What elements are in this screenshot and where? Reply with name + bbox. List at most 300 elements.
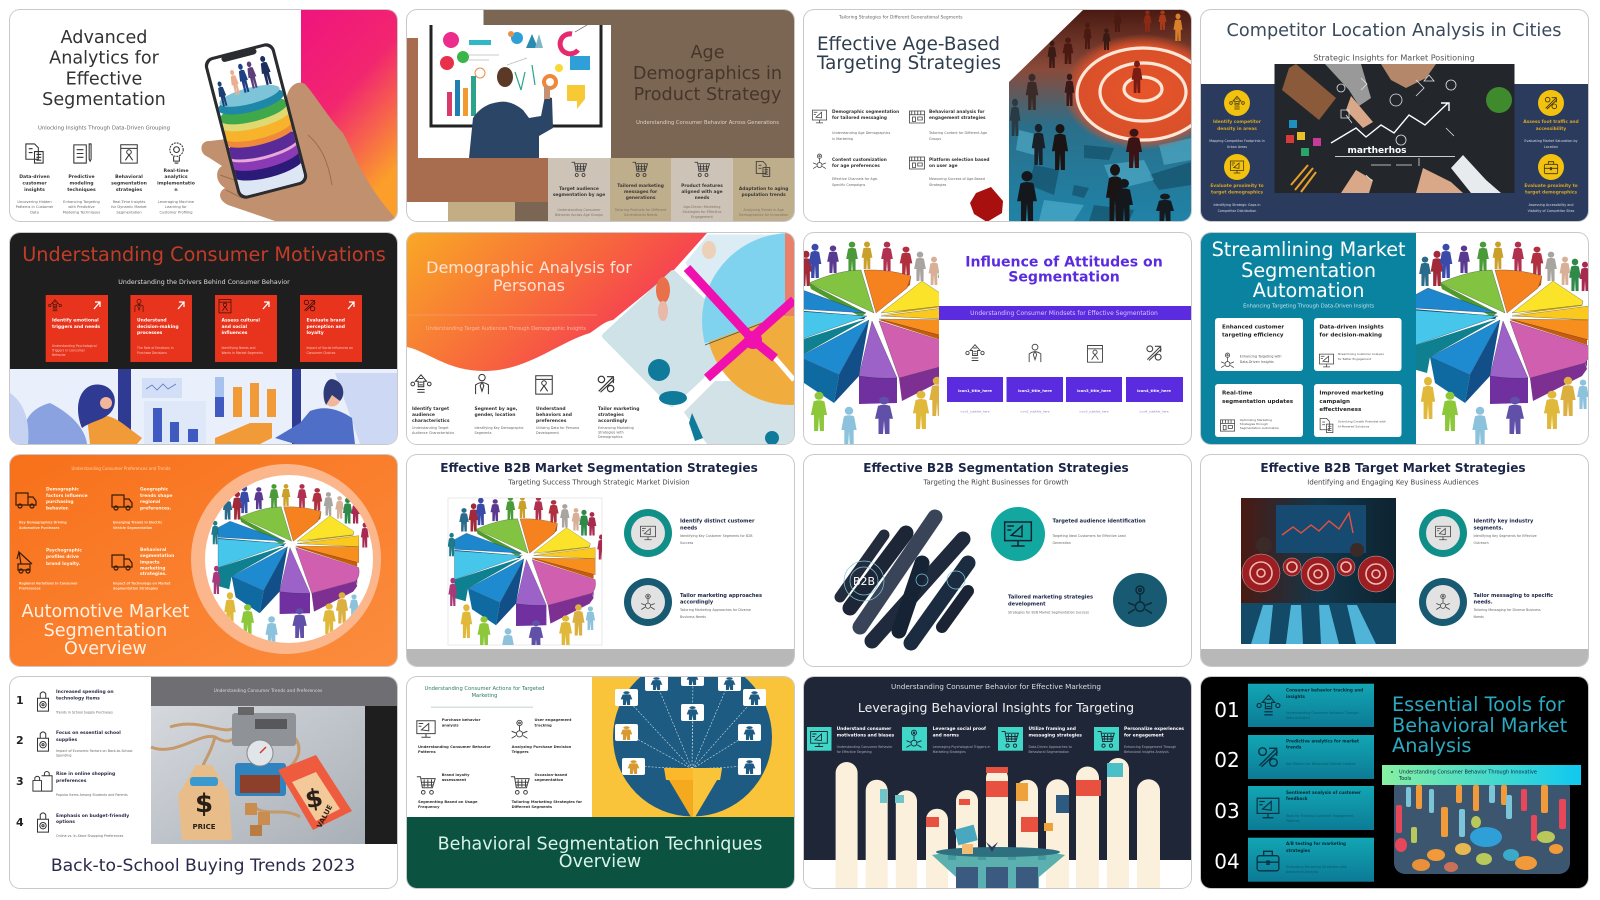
item: understand consumer motivations: Understand consumer [837, 726, 892, 732]
item: psychographic profiles: Psychographic [46, 547, 82, 553]
item: identify target audience: Understanding Target [412, 426, 449, 430]
item: tailored marketing strategies: Tailored marketing strategies [1008, 595, 1093, 601]
item: geographic trends: Emerging Trends in Electric [113, 521, 162, 525]
item: tailor marketing: strategies [598, 412, 624, 418]
item: predictive modeling techniques [63, 144, 100, 214]
panel: Leveraging Behavioral Insights for Targeting [804, 677, 1191, 888]
card: identify emotional triggers: Triggers in Consumer [51, 348, 86, 352]
item: real-time analytics implementation: Customer Profiling [159, 210, 193, 214]
item: behavioral segmentation strategies: for Dynamic Market [111, 205, 147, 209]
item 3 [1066, 345, 1122, 413]
item: tailor marketing: Enhancing Marketing [598, 426, 634, 430]
card: evaluate brand perception: Consumer Choices [306, 350, 336, 354]
card: assess cultural influences: Assess cultural [222, 317, 260, 323]
item: behavioral analysis: Groups [929, 137, 941, 141]
top subtitle: Understanding Consumer Preferences and Trends [71, 466, 171, 471]
bullet banner [1382, 765, 1581, 785]
bullet banner: Tools [1398, 776, 1412, 782]
item: tailored marketing messages [614, 162, 667, 217]
item: predictive modeling techniques: modeling [69, 180, 94, 186]
image: diagonal B2B pills [840, 517, 968, 643]
item 4 [1126, 345, 1183, 413]
item 4 [16, 813, 129, 838]
item: tailored marketing strategies: development [1008, 601, 1046, 607]
item: target audience segmentation: segmentation by age [553, 192, 605, 198]
item: leverage social proof: Leveraging Psychological Triggers in [933, 745, 990, 749]
item: evaluate proximity right: target demographics [1525, 190, 1577, 196]
item: utilize framing: Behavioral Segmentation [1028, 750, 1069, 754]
card: identify emotional triggers: Behavior [52, 352, 66, 356]
item: targeted audience identification: Generation [1052, 541, 1071, 545]
item: real-time analytics implementation: Real-time [164, 168, 188, 174]
item: platform selection [910, 157, 989, 187]
item 1: technology items [56, 696, 100, 702]
title: Effective [66, 70, 142, 90]
item: adaptation to aging: population trends [741, 192, 786, 198]
card: improved campaign effectiveness: Unlocking Growth Potential with [1338, 419, 1386, 423]
item: understand behaviors: Utilizing Data for Persona [536, 426, 579, 430]
step 02: Key Metrics for Behavioral Market Insights [1286, 762, 1356, 766]
step 03: feedback [1286, 796, 1308, 801]
item: tailor marketing: Tailor marketing [598, 406, 639, 412]
panel: Essential Tools for Behavioral Market Analysis [1201, 677, 1588, 888]
step 03 [1214, 786, 1374, 830]
item: product features: Product features [681, 183, 723, 189]
item: purchase behavior: Understanding Consumer Behavior [418, 745, 491, 749]
subtitle: Strategic Insights for Market Positioning [1313, 52, 1475, 62]
item: brand loyalty: Brand loyalty [442, 773, 470, 777]
item: demographic factors: factors influence [46, 493, 88, 499]
item: tailored marketing messages: generations [626, 195, 656, 201]
item: personalize experiences: Personalize experiences [1124, 726, 1184, 732]
item: evaluate proximity right: Evaluate proximity to [1524, 183, 1578, 189]
image: diagonal B2B pills: B2B [853, 575, 875, 588]
item: user engagement: User engagement [534, 718, 572, 722]
item: purchase behavior [417, 718, 491, 754]
item: adaptation to aging: Adaptation to aging [739, 186, 788, 192]
card: assess cultural influences: influences [222, 330, 248, 336]
item 3: preferences [56, 778, 87, 784]
card: enhanced customer targeting: Enhanced customer [1222, 324, 1284, 330]
item: behavioral analysis [910, 109, 987, 141]
card: data-driven insights: Data-driven insights [1319, 324, 1384, 330]
item: identify key industry segments: Identifying Key Segments for Effective [1474, 534, 1537, 538]
item: evaluate proximity left: target demographics [1211, 190, 1263, 196]
item: understand behaviors [536, 375, 579, 434]
item: identify target audience [411, 374, 454, 434]
bullet banner: Understanding Consumer Behavior Through Innovative [1399, 770, 1537, 776]
navy band [1201, 84, 1588, 221]
item: tailor marketing approaches: accordingly [680, 600, 714, 606]
dark header [10, 232, 397, 368]
item: understand behaviors: Development [536, 430, 559, 434]
step 01: Data Analytics [1286, 716, 1310, 720]
item 4: Online vs. In-Store Shopping Preferences [56, 834, 124, 838]
subtitle bar [939, 306, 1191, 320]
image: chalkboard planning table [1274, 64, 1514, 193]
item: evaluate proximity left: Competitor Distribution [1218, 209, 1256, 213]
title: Effective B2B Target Market Strategies [1260, 461, 1526, 475]
dark background [804, 677, 1191, 888]
item: geographic trends: preferences. [140, 506, 172, 512]
item: segment by age [474, 374, 524, 434]
item: behavioral segmentation strategies: Real-Time Insights [113, 200, 145, 204]
item: platform selection: on user age [929, 163, 958, 169]
item: target audience segmentation: Behavior Across Age Groups [555, 213, 603, 217]
image: crowd and red target [1009, 10, 1191, 221]
item 2: icon2_title_here [1018, 388, 1052, 392]
item: identify key industry segments: segments. [1474, 525, 1503, 531]
grey footer bar [1201, 649, 1588, 666]
item: product features: Age-Driven Marketing [684, 205, 720, 209]
item: identify competitor density [1209, 90, 1265, 149]
item: assess foot traffic: Assess foot traffic and [1523, 119, 1579, 125]
item: tailor marketing approaches: Tailoring Marketing Approaches for Diverse [679, 608, 751, 612]
item: adaptation to aging: Analyzing Trends in Age [743, 208, 784, 212]
item: tailor marketing: Strategies with [598, 430, 624, 434]
item: evaluate proximity right: Visibility of Competitor Sites [1528, 209, 1575, 213]
panel: Age Demographics in Product Strategy [407, 10, 794, 221]
item: tailor marketing [598, 376, 639, 438]
item: predictive modeling techniques: with Predictive [68, 205, 96, 209]
item: data-driven customer insights [16, 144, 54, 214]
item: identify distinct needs: Success [680, 541, 694, 545]
title: Essential Tools for [1392, 693, 1565, 716]
item: brand loyalty: assessment [442, 778, 466, 782]
item: identify competitor density: Identify competitor [1213, 119, 1262, 125]
card: enhanced customer targeting: targeting efficiency [1222, 332, 1284, 338]
item: demographic factors: Automotive Purchases [19, 526, 59, 530]
item: demographic factors: Demographic [46, 487, 79, 493]
card: improved campaign effectiveness: AI-Powered Solutions [1338, 424, 1370, 428]
card: real-time updates: Real-time [1222, 390, 1253, 396]
subtitle: Identifying and Engaging Key Business Audiences [1307, 478, 1479, 486]
item: understand consumer motivations: Understanding Consumer Behavior [837, 745, 893, 749]
item: identify competitor density: density in areas [1217, 126, 1257, 132]
item: behavioral segmentation strategies: Segmentation [116, 210, 142, 214]
step 04: Behavioral Analysis [1286, 870, 1318, 874]
panel: Effective B2B Target Market Strategies [1201, 455, 1588, 666]
item: data-driven customer insights: Data-driven [19, 174, 50, 180]
title: Advanced [61, 28, 147, 48]
item: data-driven customer insights: customer [22, 180, 47, 186]
item: tailor marketing approaches: Tailor marketing approaches [680, 593, 762, 599]
subtitle: Understanding Target Audiences Through Demographic Insights [426, 326, 586, 332]
item 1: icon1_title_here [958, 388, 992, 392]
card: understand decision-making: The Role of Emotions in [136, 346, 174, 350]
item 2: icon2_subtitle_here [1020, 409, 1050, 413]
item: evaluate proximity left [1210, 154, 1264, 213]
item: identify competitor density: Mapping Competitor Footprints in [1209, 139, 1265, 143]
item: evaluate proximity right: Assessing Accessibility and [1529, 203, 1573, 207]
item: tailor messaging: Tailor messaging to specific [1474, 593, 1553, 599]
item: tailor marketing: Demographics [598, 434, 623, 438]
title: Overview [64, 639, 147, 659]
card: understand decision-making: Understand [137, 317, 167, 323]
item: behavioral segmentation: Segmentation Strategies [113, 587, 158, 591]
image: pie chart in ring [191, 464, 381, 654]
card: evaluate brand perception: loyalty [306, 330, 324, 336]
item 3 [16, 771, 128, 797]
item: segment by age: gender, location [474, 412, 515, 418]
card: data-driven insights: for Better Engagement [1338, 356, 1372, 360]
item: predictive modeling techniques: techniques [67, 187, 96, 193]
title: Automation [1253, 278, 1364, 302]
card: enhanced customer targeting [1215, 318, 1303, 370]
title band: Overview [559, 852, 641, 872]
item: real-time analytics implementation: implementatio [157, 180, 195, 186]
item 1: Trends in School Supply Purchases [55, 710, 113, 714]
item: geographic trends: Geographic [140, 487, 169, 493]
subtitle: Understanding the Drivers Behind Consumer Behavior [118, 278, 290, 286]
item: psychographic profiles: profiles drive [46, 554, 79, 560]
subtitle: Unlocking Insights Through Data-Driven Grouping [38, 126, 170, 132]
item: geographic trends [112, 487, 172, 530]
item: data-driven customer insights: Data [30, 210, 39, 214]
top subtitle: Marketing [472, 693, 497, 699]
item: demographic segmentation: Understanding Age Demographics [832, 131, 891, 135]
title: Analysis [1392, 734, 1471, 757]
title: Segmentation [1008, 269, 1120, 285]
item 1 [16, 689, 114, 714]
item: tailor messaging: Tailoring Messaging for Diverse Business [1472, 608, 1541, 612]
title: Analytics for [49, 48, 160, 68]
item: behavioral analysis: Tailoring Content for Different Age [928, 131, 987, 135]
item 4: icon4_title_here [1137, 388, 1171, 392]
item: identify competitor density: Urban Areas [1227, 145, 1247, 149]
panel: Streamlining Market Segmentation Automation [1201, 232, 1588, 444]
card: identify emotional triggers: Identify emotional [52, 317, 99, 323]
item: tailored marketing messages: Generational Needs [624, 213, 658, 217]
item: evaluate proximity right [1524, 154, 1578, 213]
title: Demographic Analysis for [426, 258, 632, 276]
image: price and value tags: PRICE [192, 823, 216, 831]
title band [407, 817, 794, 888]
item: psychographic profiles: Preferences [19, 587, 41, 591]
item: leverage social proof: Leverage social proof [933, 726, 986, 732]
item: behavioral segmentation: segmentation [140, 553, 174, 559]
image: price and value tags: VALUE [315, 803, 334, 829]
item: tailored marketing messages: messages for [624, 189, 658, 195]
red hexagon [970, 187, 1003, 222]
image: colored pins on data grid [1394, 777, 1570, 874]
item: purchase behavior: Purchase behavior [442, 718, 481, 722]
item: understand consumer motivations: motivations and biases [837, 733, 894, 739]
card: assess cultural influences [215, 294, 277, 362]
title: Effective B2B Segmentation Strategies [863, 461, 1129, 475]
item 4: 4 [16, 816, 24, 829]
item 2: Spending [56, 754, 72, 758]
card: assess cultural influences: Wants in Market Segments [222, 350, 263, 354]
illustration: team with charts [10, 368, 397, 444]
step 03: Sentiment analysis of customer [1286, 790, 1362, 795]
title: Segmentation [42, 90, 166, 110]
card: improved campaign effectiveness: campaign [1319, 398, 1350, 404]
item: psychographic profiles: Regional Variations in Consumer [19, 582, 78, 586]
item 3: Popular Items Among Students and Parents [56, 793, 128, 797]
colour blocks [407, 10, 794, 221]
item: predictive modeling techniques: Predictive [68, 174, 95, 180]
step 01: 01 [1214, 698, 1240, 722]
item: behavioral segmentation: marketing [140, 565, 165, 571]
card: enhanced customer targeting: Data-Driven Insights [1240, 360, 1274, 364]
divider [431, 706, 533, 708]
card: evaluate brand perception: Evaluate brand [306, 317, 345, 323]
item: user engagement: Analyzing Purchase Decision [512, 745, 572, 749]
item 3: 3 [16, 775, 24, 788]
item: behavioral segmentation: strategies. [140, 571, 167, 577]
card: real-time updates: Optimizing Marketing [1240, 418, 1272, 422]
step 02: trends [1286, 745, 1302, 750]
step 04: Evaluating Marketing Strategies with [1286, 865, 1347, 869]
card: identify emotional triggers: triggers and needs [52, 324, 100, 330]
title: Behavioral Market [1392, 714, 1568, 737]
item: segment by age: Segment by age, [474, 406, 518, 412]
item 2: Impact of Economic Factors on Back-to-School [56, 749, 132, 753]
step 03: Patterns [1286, 819, 1300, 823]
item: identify distinct needs: Identifying Key Customer Segments for B2B [680, 534, 753, 538]
top subtitle: Understanding Consumer Behavior for Effective Marketing [891, 682, 1101, 691]
item: geographic trends: Vehicle Segmentation [113, 526, 153, 530]
item 4: options [56, 819, 75, 825]
title band: Behavioral Segmentation Techniques [438, 835, 762, 855]
item 1: Increased spending on [56, 689, 114, 695]
card: data-driven insights: for decision-making [1319, 332, 1382, 338]
item: assess foot traffic: Location [1544, 145, 1558, 149]
subtitle: Targeting Success Through Strategic Market Division [507, 478, 690, 486]
item: adaptation to aging [739, 162, 788, 217]
step 04: strategies [1286, 848, 1310, 853]
item: assess foot traffic: accessibility [1536, 126, 1566, 132]
item: identify key industry segments: Outreach [1474, 541, 1489, 545]
title: Back-to-School Buying Trends 2023 [51, 856, 355, 876]
item: behavioral segmentation strategies: segmentation [111, 180, 147, 186]
card: evaluate brand perception [300, 294, 362, 362]
subtitle bar: Understanding Consumer Mindsets for Effective Segmentation [970, 310, 1158, 316]
image: price and value tags [151, 706, 397, 844]
item: occasion-based: segmentation [534, 778, 564, 782]
item: occasion-based [511, 773, 582, 809]
item: tailored marketing strategies: Strategies for B2B Market Segmentation Success [1008, 611, 1089, 615]
item: demographic segmentation [812, 109, 899, 141]
item: occasion-based: Different Segments [512, 805, 553, 809]
item: content customization: Effective Channels for Age- [832, 177, 879, 181]
step 03: Tools for Tracking Customer Engagement [1285, 814, 1354, 818]
item: real-time analytics implementation: n [174, 188, 178, 193]
panel: Advanced Analytics for Effective Segmentation [10, 10, 397, 221]
item: user engagement: Triggers [512, 750, 529, 754]
item: evaluate proximity left: Identifying Strategic Gaps in [1214, 203, 1260, 207]
item: identify target audience: Audience Characteristics [412, 430, 454, 434]
title: Understanding Consumer Motivations [22, 242, 386, 266]
step 02: 02 [1214, 748, 1240, 772]
top subtitle: Tailoring Strategies for Different Generational Segments [838, 14, 963, 20]
card: evaluate brand perception: Impact of Social Influences on [306, 346, 353, 350]
item: platform selection: Strategies [929, 183, 947, 187]
card: understand decision-making: decision-making [137, 324, 179, 330]
item: behavioral segmentation [112, 547, 174, 591]
item: demographic segmentation: for tailored messaging [832, 115, 887, 121]
panel: Effective B2B Market Segmentation Strategies [407, 455, 794, 666]
item: identify distinct needs: Identify distinct customer [680, 519, 755, 525]
item: content customization: Content customization [832, 157, 887, 163]
panel: Effective Age-Based Targeting Strategies [804, 10, 1191, 221]
panel: Influence of Attitudes on Segmentation [804, 232, 1191, 444]
image: pie chart with people [804, 242, 939, 444]
item 2 [1006, 344, 1063, 413]
item: product features: Engagement [691, 215, 713, 219]
title: Influence of Attitudes on [965, 254, 1163, 270]
item: tailored marketing messages: Tailoring Products for Different [614, 208, 667, 212]
item: demographic segmentation: Demographic segmentation [832, 109, 899, 115]
card: improved campaign effectiveness [1314, 384, 1402, 436]
item 3: icon3_title_here [1077, 388, 1111, 392]
card: understand decision-making: processes [137, 330, 163, 336]
item: identify key industry segments [1419, 509, 1537, 557]
item: segment by age: Segments [474, 430, 492, 434]
card: enhanced customer targeting: Enhancing Targeting with [1240, 354, 1281, 358]
item: targeted audience identification: Targeting Ideal Customers for Effective Lead [1052, 534, 1126, 538]
card: improved campaign effectiveness: effectiveness [1319, 406, 1362, 412]
image: price and value tags: $ [303, 783, 325, 814]
panel: Behavioral Segmentation Techniques Overview [407, 677, 794, 888]
image: diamond crops of pie chart [602, 233, 794, 444]
card: improved campaign effectiveness: Improved marketing [1319, 390, 1384, 396]
item: identify target audience: characteristics [412, 418, 450, 424]
item: platform selection: Platform selection based [929, 157, 989, 163]
item: behavioral segmentation: impacts [140, 560, 160, 566]
card: data-driven insights: Streamlining Customer Analysis [1338, 352, 1384, 356]
item: personalize experiences: Behavioral Insights Analysis [1124, 750, 1169, 754]
item 1 [947, 344, 1003, 413]
step 01: Understanding Consumer Behavior Through [1286, 711, 1359, 715]
panel: Demographic Analysis for Personas [407, 232, 794, 444]
item: targeted audience identification [991, 507, 1146, 561]
panel: Competitor Location Analysis in Cities [1201, 10, 1588, 221]
image: pie chart with people [1416, 242, 1588, 444]
item: adaptation to aging: Demographics for Innovation [739, 213, 788, 217]
item: leverage social proof [902, 726, 990, 754]
title: Effective B2B Market Segmentation Strategies [440, 461, 758, 475]
item: target audience segmentation [553, 162, 605, 217]
item: behavioral analysis: Behavioral analysis for [929, 109, 985, 115]
item: purchase behavior: Patterns [418, 750, 437, 754]
card: assess cultural influences: and social [222, 324, 248, 330]
title: Leveraging Behavioral Insights for Targeting [858, 700, 1134, 715]
item: understand behaviors: behaviors and [536, 412, 572, 418]
item: behavioral segmentation strategies [111, 145, 147, 214]
item: brand loyalty: Segmenting Based on Usage [418, 800, 478, 804]
item: targeted audience identification: Targeted audience identification [1052, 519, 1146, 525]
step 03: 03 [1214, 799, 1240, 823]
step 04: 04 [1214, 850, 1240, 874]
item 4: Emphasis on budget-friendly [56, 813, 129, 819]
item: identify distinct needs: needs [680, 525, 697, 531]
item 2 [16, 730, 132, 758]
grey footer bar [407, 649, 794, 666]
subtitle: Enhancing Targeting Through Data-Driven Insights [1243, 303, 1374, 309]
card: real-time updates: Strategies through [1240, 422, 1268, 426]
step 01: Consumer behavior tracking and [1286, 688, 1363, 693]
item: evaluate proximity left: Evaluate proximity to [1210, 183, 1264, 189]
item: identify distinct needs [624, 509, 755, 557]
title: Targeting Strategies [816, 53, 1001, 74]
item: assess foot traffic [1523, 90, 1579, 149]
subtitle: Understanding Consumer Behavior Across Generations [636, 120, 779, 126]
item: behavioral segmentation: Behavioral [140, 547, 167, 553]
item: target audience segmentation: Understanding Consumer [557, 208, 601, 212]
item: segment by age: Identifying Key Demographic [474, 426, 524, 430]
